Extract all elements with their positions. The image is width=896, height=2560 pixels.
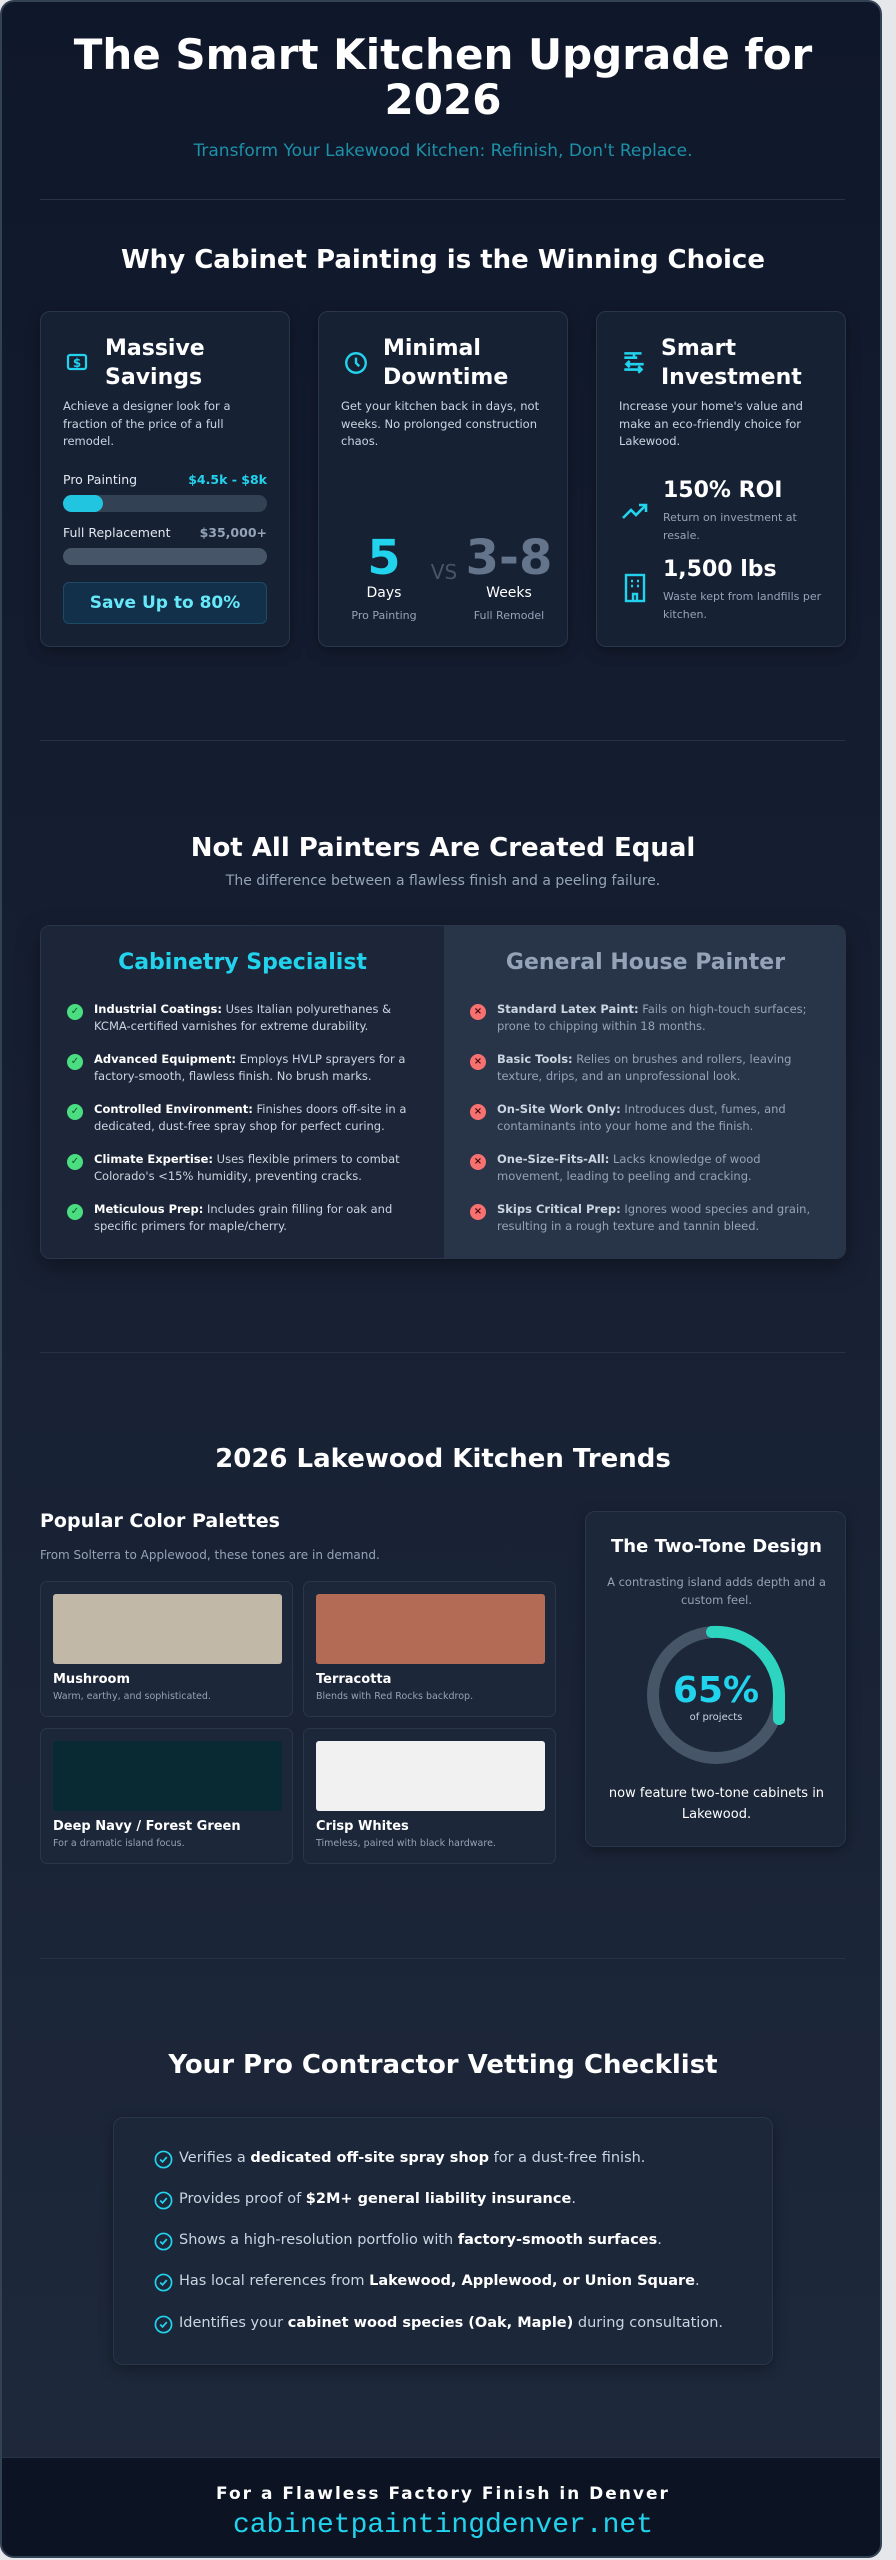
heading xyxy=(383,336,508,390)
description: Get your kitchen back in days, not weeks. No prolonged construction chaos. xyxy=(341,399,539,448)
callout: save up to 80%: Save Up to 80% xyxy=(90,593,240,613)
stat: 5 days vs 3-8 weeks: Full Remodel xyxy=(474,609,544,622)
list: painter items: Standard Latex Paint: Fails on high-touch surfaces; prone to chipping within 18 months. xyxy=(497,1002,807,1033)
panel: massive savings xyxy=(40,311,290,647)
swatch: mushroom: Mushroom xyxy=(53,1672,130,1687)
panel: checklist: Provides proof of $2M+ general liability insurance. xyxy=(179,2191,576,2207)
description: Increase your home's value and make an eco-friendly choice for Lakewood. xyxy=(619,399,803,448)
footer: cabinetpaintingdenver.net xyxy=(233,2510,653,2541)
panel: two-tone design xyxy=(585,1511,846,1847)
heading: not all painters: Not All Painters Are Created Equal xyxy=(191,833,695,863)
bar chart: cost comparison xyxy=(63,472,268,565)
swatch: crisp whites xyxy=(303,1728,556,1864)
panel: two-tone design: A contrasting island adds depth and a custom feel. xyxy=(607,1575,826,1607)
stat: 5 days vs 3-8 weeks: Weeks xyxy=(486,585,532,601)
icon: money: $ xyxy=(73,356,81,370)
list: specialist items: ✓ xyxy=(71,1006,79,1017)
heading: Minimal xyxy=(383,336,481,361)
swatch: terracotta: Terracotta xyxy=(316,1672,391,1687)
list: painter items: On-Site Work Only: Introduces dust, fumes, and contaminants into your home and the finish. xyxy=(497,1102,786,1133)
icon: trend up xyxy=(622,504,648,519)
list: specialist items: ✓ xyxy=(71,1156,79,1167)
icon: exchange xyxy=(624,352,644,374)
panel: comparison xyxy=(40,925,846,1259)
bar chart: cost comparison: $4.5k - $8k xyxy=(188,472,267,487)
subtitle: Transform Your Lakewood Kitchen: Refinish, Don't Replace. xyxy=(194,141,692,161)
chart: donut 65%: 65% xyxy=(673,1670,759,1711)
bar chart: cost comparison: Pro Painting xyxy=(63,472,137,487)
panel: checklist: Identifies your cabinet wood species (Oak, Maple) during consultation. xyxy=(179,2315,723,2331)
stat: waste: Waste kept from landfills per kitchen. xyxy=(663,590,821,621)
panel: smart investment xyxy=(596,311,846,647)
swatch: mushroom: Warm, earthy, and sophisticated. xyxy=(53,1691,211,1702)
list: specialist items: ✓ xyxy=(71,1056,79,1067)
column: general house painter xyxy=(444,926,847,1260)
callout: save up to 80% xyxy=(63,582,267,624)
heading: Massive xyxy=(105,336,205,361)
list: specialist items: Advanced Equipment: Employs HVLP sprayers for a factory-smooth, flawless finish. No brush marks. xyxy=(94,1052,405,1083)
chart: donut 65% xyxy=(647,1626,785,1764)
icon: clock xyxy=(345,352,367,374)
list: specialist items: Industrial Coatings: Uses Italian polyurethanes & KCMA-certified varnishes for extreme durability. xyxy=(94,1002,391,1033)
swatch: mushroom xyxy=(40,1581,293,1717)
swatch: crisp whites: Crisp Whites xyxy=(316,1819,409,1834)
list: painter items: × xyxy=(474,1206,482,1217)
footer xyxy=(2,2457,884,2560)
swatch: deep navy: Deep Navy / Forest Green xyxy=(53,1819,241,1834)
list: painter items: Basic Tools: Relies on brushes and rollers, leaving texture, drips, and an unprofessional look. xyxy=(497,1052,791,1083)
heading: checklist: Your Pro Contractor Vetting Checklist xyxy=(168,2050,718,2080)
panel: checklist: Shows a high-resolution portfolio with factory-smooth surfaces. xyxy=(179,2232,662,2248)
heading: Smart xyxy=(661,336,736,361)
panel: checklist: Has local references from Lakewood, Applewood, or Union Square. xyxy=(179,2273,700,2289)
column: general house painter: General House Painter xyxy=(506,950,785,975)
list: specialist items: Meticulous Prep: Includes grain filling for oak and specific primers for maple/cherry. xyxy=(94,1202,392,1233)
title: The Smart Kitchen Upgrade for xyxy=(74,30,812,79)
heading: trends: 2026 Lakewood Kitchen Trends xyxy=(215,1444,671,1474)
list: specialist items: ✓ xyxy=(71,1106,79,1117)
column: cabinetry specialist xyxy=(41,926,444,1260)
heading: Investment xyxy=(661,365,802,390)
stat: 5 days vs 3-8 weeks: 5 xyxy=(367,530,401,586)
panel: minimal downtime xyxy=(318,311,568,647)
list: painter items xyxy=(470,1002,810,1233)
subheading: The difference between a flawless finish and a peeling failure. xyxy=(226,873,660,889)
stat: 5 days vs 3-8 weeks xyxy=(351,530,552,622)
swatch: terracotta xyxy=(303,1581,556,1717)
swatch: terracotta: Blends with Red Rocks backdrop. xyxy=(316,1691,473,1702)
description: Achieve a designer look for a fraction of the price of a full remodel. xyxy=(63,399,230,448)
heading: Savings xyxy=(105,365,202,390)
list: painter items: × xyxy=(474,1006,482,1017)
list: painter items: × xyxy=(474,1056,482,1067)
list: specialist items: Controlled Environment: Finishes doors off-site in a dedicated, dust-free spray shop for perfect curing. xyxy=(94,1102,406,1133)
panel: two-tone design: now feature two-tone cabinets in Lakewood. xyxy=(609,1786,824,1822)
text: palettes subtitle: From Solterra to Applewood, these tones are in demand. xyxy=(40,1548,380,1562)
stat: waste xyxy=(624,557,822,621)
icon: building xyxy=(624,574,646,602)
swatch: deep navy xyxy=(40,1728,293,1864)
heading xyxy=(105,336,205,390)
stat: 5 days vs 3-8 weeks: 3-8 xyxy=(466,530,552,586)
panel: checklist xyxy=(113,2117,773,2365)
list: specialist items xyxy=(67,1002,406,1233)
stat: waste: 1,500 lbs xyxy=(663,557,777,582)
heading: why cabinet painting: Why Cabinet Painting is the Winning Choice xyxy=(121,245,765,275)
title: 2026 xyxy=(385,75,501,124)
column: cabinetry specialist: Cabinetry Specialist xyxy=(118,950,367,975)
list: specialist items: Climate Expertise: Uses flexible primers to combat Colorado's <15% humidity, preventing cracks. xyxy=(94,1152,400,1183)
heading: popular color palettes: Popular Color Palettes xyxy=(40,1510,280,1532)
icon: money xyxy=(66,354,88,370)
panel: two-tone design: The Two-Tone Design xyxy=(611,1536,822,1557)
list: painter items: Skips Critical Prep: Ignores wood species and grain, resulting in a rough texture and tannin bleed. xyxy=(497,1202,810,1233)
stat: ROI: Return on investment at resale. xyxy=(663,511,797,542)
stat: ROI: 150% ROI xyxy=(663,478,782,503)
swatch: crisp whites: Timeless, paired with black hardware. xyxy=(316,1838,496,1849)
list: painter items: One-Size-Fits-All: Lacks knowledge of wood movement, leading to peeling and cracking. xyxy=(497,1152,761,1183)
swatch: deep navy: For a dramatic island focus. xyxy=(53,1838,185,1849)
list: specialist items: ✓ xyxy=(71,1206,79,1217)
chart: donut 65%: of projects xyxy=(690,1712,742,1723)
bar chart: cost comparison: Full Replacement xyxy=(63,525,170,540)
heading: Downtime xyxy=(383,365,508,390)
bar chart: cost comparison: $35,000+ xyxy=(200,525,267,540)
stat: 5 days vs 3-8 weeks: Pro Painting xyxy=(351,609,417,622)
footer: For a Flawless Factory Finish in Denver xyxy=(216,2484,670,2504)
stat: ROI xyxy=(622,478,797,542)
stat: 5 days vs 3-8 weeks: Days xyxy=(367,585,401,601)
panel: checklist: Verifies a dedicated off-site spray shop for a dust-free finish. xyxy=(179,2150,645,2166)
list: painter items: × xyxy=(474,1156,482,1167)
stat: 5 days vs 3-8 weeks: VS xyxy=(431,560,457,584)
title xyxy=(74,30,812,124)
list: painter items: × xyxy=(474,1106,482,1117)
heading xyxy=(661,336,802,390)
